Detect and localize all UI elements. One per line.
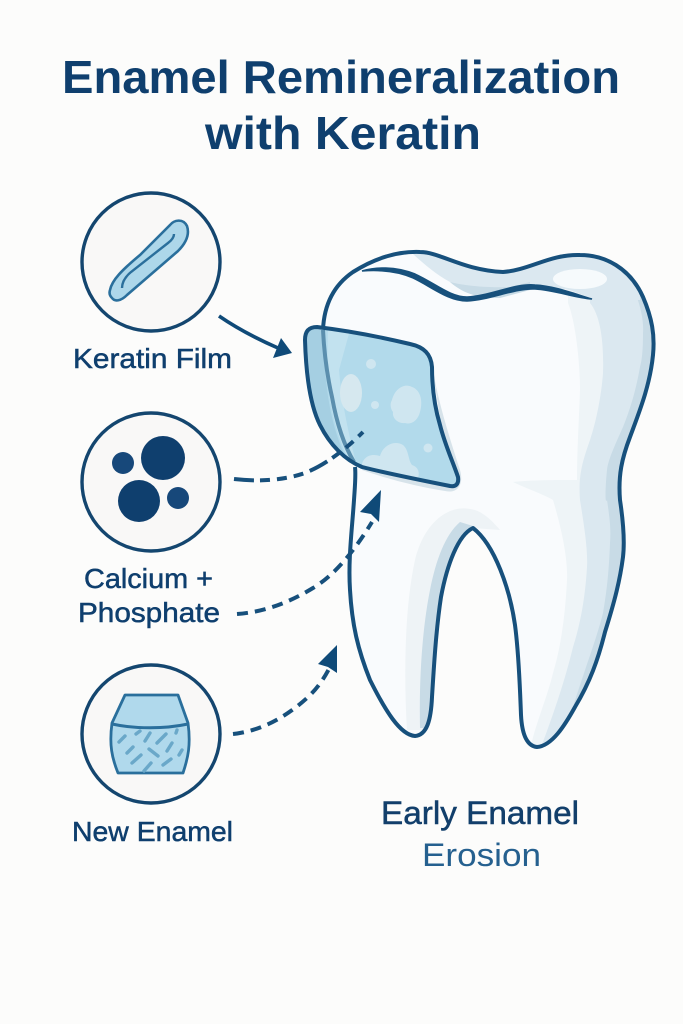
arrow: new enamel to tooth [233, 645, 337, 734]
label: calcium + phosphate: Calcium + [84, 563, 213, 594]
erosion spots [340, 374, 362, 412]
crown groove line [362, 268, 592, 301]
title: Enamel Remineralization [62, 51, 620, 103]
icon: calcium and phosphate circle [82, 413, 220, 551]
label: early enamel erosion: Erosion [422, 837, 541, 873]
label: early enamel erosion [381, 795, 579, 873]
label: keratin film: Keratin Film [73, 343, 232, 374]
tooth body [323, 252, 654, 747]
title: with Keratin [204, 107, 481, 159]
title [62, 51, 620, 159]
icon: keratin film circle [82, 193, 220, 331]
tooth outline [323, 252, 654, 747]
tooth shading [406, 254, 652, 745]
tooth illustration [305, 240, 683, 750]
label: new enamel: New Enamel [72, 816, 233, 847]
arrow: calcium + phosphate to film [234, 432, 363, 480]
film soft shadow [362, 365, 461, 492]
label: early enamel erosion: Early Enamel [381, 795, 579, 831]
label: calcium + phosphate: Phosphate [78, 597, 220, 628]
icon: new enamel circle [82, 665, 220, 803]
arrow: phosphate to enamel [237, 490, 381, 614]
crown highlight [553, 269, 607, 289]
keratin film on enamel [303, 325, 460, 488]
label: calcium + phosphate [78, 563, 220, 628]
arrow: keratin film to tooth [219, 316, 292, 358]
infographic canvas [65, 60, 656, 866]
